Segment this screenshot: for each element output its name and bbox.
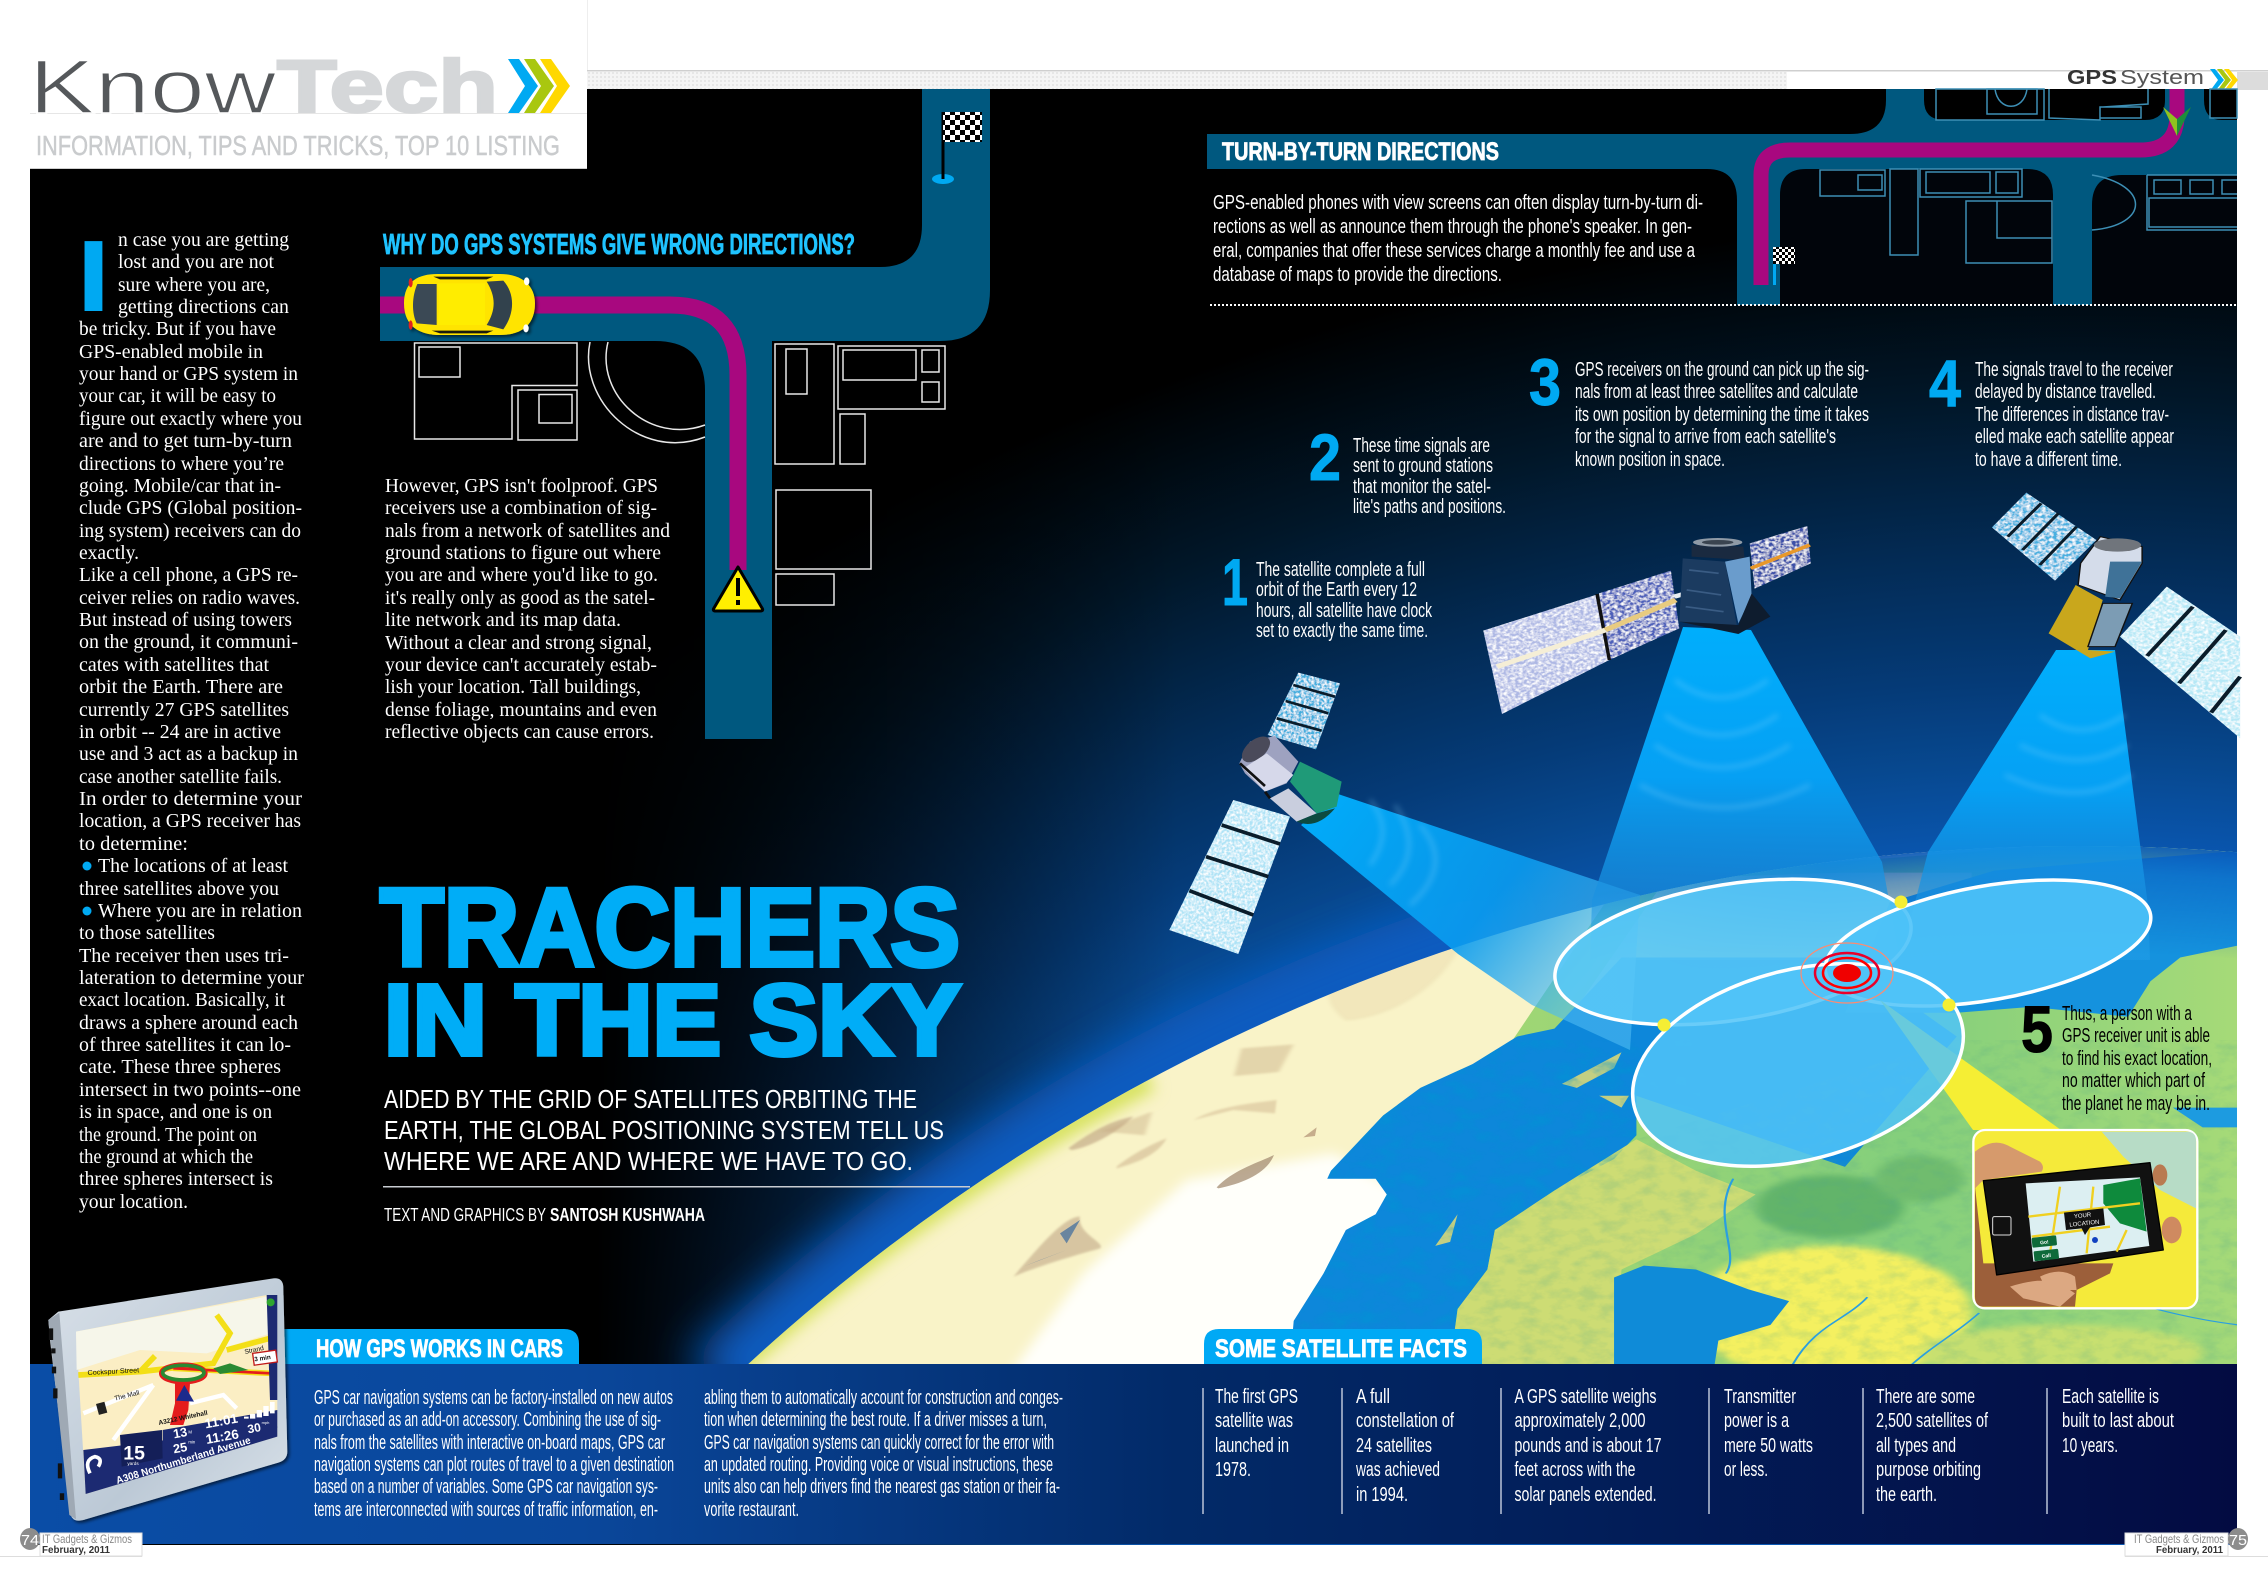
step 1: hours, all satellite have clock <box>1256 600 1433 622</box>
logo: KnowTech masthead <box>29 0 587 169</box>
text: GPS in cars: GPS car navigation systems can be factory-installed on new autos <box>314 1387 673 1409</box>
text: foolproof paragraph: your device can't accurately estab- <box>385 654 657 676</box>
text: intro column: going. Mobile/car that in- <box>79 475 281 497</box>
footer: page 74: February, 2011 <box>42 1544 110 1556</box>
globe: earth with sea and land masses <box>748 846 2237 1364</box>
text: foolproof paragraph: nals from a network of satellites and <box>385 520 670 542</box>
step 2: sent to ground stations <box>1353 455 1493 477</box>
step 4: The signals travel to the receiver <box>1975 359 2173 381</box>
text: intro column: exactly. <box>79 542 139 564</box>
fact 3: approximately 2,000 <box>1514 1410 1646 1432</box>
text: GPS in cars: based on a number of variables. Some GPS car navigation sys- <box>314 1476 658 1498</box>
text: intro column: cates with satellites that <box>79 654 269 676</box>
tab: some satellite facts: SOME SATELLITE FACTS <box>1215 1335 1467 1363</box>
text: intro column: figure out exactly where you <box>79 408 302 430</box>
inset: phone in hand: YOUR <box>2074 1212 2092 1220</box>
fact 4: power is a <box>1724 1410 1790 1432</box>
satellite 4 <box>1992 493 2240 738</box>
yellow connector to phone inset <box>1880 1000 2061 1130</box>
text: intro column: The locations of at least <box>98 855 288 877</box>
step 3: GPS receivers on the ground can pick up the sig- <box>1575 359 1869 381</box>
title rule <box>383 1186 970 1188</box>
text: intro column: sure where you are, <box>118 274 270 296</box>
text: GPS in cars: GPS car navigation systems can quickly correct for the error with <box>704 1432 1054 1454</box>
fact 4 <box>1724 1386 1813 1481</box>
text: turn-by-turn: database of maps to provide the directions. <box>1213 264 1502 286</box>
satellite 3 <box>1483 526 1811 714</box>
text: intro column: lateration to determine your <box>79 967 304 989</box>
text: GPS in cars: tion when determining the best route. If a driver misses a turn, <box>704 1409 1047 1431</box>
step 3: 3 <box>1529 345 1561 419</box>
text: foolproof paragraph: lite network and its map data. <box>385 609 621 631</box>
text: intro column: three satellites above you <box>79 878 279 900</box>
icon: car GPS device: mph <box>262 1420 269 1425</box>
text: GPS in cars: vorite restaurant. <box>704 1499 799 1521</box>
inset: phone in hand: LOCATION <box>2069 1220 2100 1229</box>
text: foolproof paragraph: ground stations to figure out where <box>385 542 661 564</box>
text: foolproof paragraph: you are and where you'd like to go. <box>385 564 658 586</box>
credit line <box>384 1205 705 1225</box>
text: intro column: on the ground, it communi- <box>79 631 298 653</box>
tab: how GPS works in cars: HOW GPS WORKS IN CARS <box>316 1335 563 1363</box>
text: intro column: n case you are getting <box>118 229 289 251</box>
footer: page 74: 74 <box>21 1532 39 1549</box>
step 4: The differences in distance trav- <box>1975 404 2169 426</box>
text: intro column: your car, it will be easy to <box>79 385 276 407</box>
fact 6 <box>2062 1386 2174 1457</box>
road map: wrong directions <box>380 89 990 739</box>
text: intro column: draws a sphere around each <box>79 1012 298 1034</box>
text: intro column: But instead of using towers <box>79 609 292 631</box>
inset: phone in hand: Go! <box>2040 1239 2049 1246</box>
credit line: SANTOSH KUSHWAHA <box>550 1205 705 1225</box>
icon: car GPS device: yards <box>127 1461 139 1466</box>
icon: car GPS device: 15 <box>123 1443 145 1464</box>
building outlines <box>1820 89 2237 263</box>
step 2: that monitor the satel- <box>1353 476 1491 498</box>
step 4 <box>1929 346 2174 471</box>
fact 5: 2,500 satellites of <box>1876 1410 1988 1432</box>
fact 5: the earth. <box>1876 1484 1937 1506</box>
text: intro column: to those satellites <box>79 922 215 944</box>
fact 1: satellite was <box>1215 1410 1293 1432</box>
text: intro column: to determine: <box>79 833 188 855</box>
step 3: for the signal to arrive from each satellite's <box>1575 426 1836 448</box>
inset: phone in hand: Call <box>2042 1253 2052 1260</box>
text: intro column: case another satellite fails. <box>79 766 282 788</box>
coverage circles on the ground <box>1545 857 2160 1199</box>
icon: car GPS device: Cockspur Street <box>87 1367 139 1377</box>
heading: turn-by-turn: TURN-BY-TURN DIRECTIONS <box>1222 138 1499 166</box>
tab: how GPS works in cars <box>284 1329 579 1364</box>
text: intro column: your location. <box>79 1191 188 1213</box>
drop cap: I <box>80 223 107 330</box>
route line <box>1761 89 2177 285</box>
logo: KnowTech masthead: INFORMATION, TIPS AND TRICKS, TOP 10 LISTING <box>36 130 560 161</box>
fact dividers <box>1203 1388 2047 1514</box>
title <box>380 866 961 1076</box>
icon: finish flag <box>932 112 982 184</box>
icon: warning triangle <box>713 567 763 611</box>
intersection dots <box>1658 896 1956 1032</box>
step 2: lite's paths and positions. <box>1353 496 1506 518</box>
text: GPS in cars: an updated routing. Providing voice or visual instructions, these <box>704 1454 1053 1476</box>
fact 2: constellation of <box>1356 1410 1454 1432</box>
fact 1: The first GPS <box>1215 1386 1298 1408</box>
fact 2: in 1994. <box>1356 1484 1408 1506</box>
text: GPS in cars: units also can help drivers find the nearest gas station or their fa- <box>704 1476 1060 1498</box>
text: turn-by-turn: GPS-enabled phones with view screens can often display turn-by-turn di- <box>1213 192 1703 214</box>
logo: KnowTech masthead: Tech <box>277 45 498 128</box>
text: intro column: are and to get turn-by-turn <box>79 430 292 452</box>
fact 6: Each satellite is <box>2062 1386 2159 1408</box>
step 2: These time signals are <box>1353 435 1490 457</box>
footer: page 74 <box>0 1528 142 1557</box>
fact 1: launched in <box>1215 1435 1289 1457</box>
text: intro column: ing system) receivers can do <box>79 520 301 542</box>
signal beam: satellite 4 <box>1900 650 2150 960</box>
city blocks top <box>1924 89 2237 120</box>
fact 3: feet across with the <box>1514 1459 1636 1481</box>
text: intro column: intersect in two points--one <box>79 1079 301 1101</box>
fact 2: A full <box>1356 1386 1390 1408</box>
running header strip <box>587 0 2268 90</box>
icon: car GPS device: A308 Northumberland Avenue <box>115 1435 252 1487</box>
inset: phone in hand <box>1973 1130 2197 1308</box>
icon: car GPS device <box>48 1278 287 1521</box>
dotted divider <box>1210 304 2237 306</box>
step 2 <box>1309 420 1506 518</box>
text: intro column: location, a GPS receiver has <box>79 810 301 832</box>
text: GPS in cars: tems are interconnected with sources of traffic information, en- <box>314 1499 658 1521</box>
subtitle: AIDED BY THE GRID OF SATELLITES ORBITING THE <box>384 1084 917 1114</box>
heading: wrong directions: WHY DO GPS SYSTEMS GIVE WRONG DIRECTIONS? <box>383 229 855 261</box>
text: foolproof paragraph: dense foliage, mountains and even <box>385 699 657 721</box>
step 5: no matter which part of <box>2062 1070 2205 1092</box>
credit line: TEXT AND GRAPHICS BY <box>384 1205 546 1225</box>
fact 2: 24 satellites <box>1356 1435 1432 1457</box>
tab: some satellite facts <box>1204 1329 1482 1364</box>
text: turn-by-turn: eral, companies that offer these services charge a monthly fee and use a <box>1213 240 1696 262</box>
signal beam: satellite 3 <box>1590 627 1900 960</box>
text: intro column: cate. These three spheres <box>79 1056 281 1078</box>
fact 5 <box>1876 1386 1988 1506</box>
building outlines <box>414 342 945 605</box>
fact 6: built to last about <box>2062 1410 2174 1432</box>
step 4: elled make each satellite appear <box>1975 426 2174 448</box>
section label: GPS System <box>2067 67 2238 91</box>
text: intro column: of three satellites it can lo- <box>79 1034 291 1056</box>
step 3 <box>1529 345 1869 471</box>
fact 3: pounds and is about 17 <box>1514 1435 1662 1457</box>
step 3: its own position by determining the time it takes <box>1575 404 1869 426</box>
route line <box>380 305 738 570</box>
step 4: 4 <box>1929 346 1961 420</box>
footer: page 75: 75 <box>2229 1532 2247 1549</box>
text: intro column <box>79 223 304 1213</box>
icon: car GPS device: Strand <box>244 1345 265 1356</box>
fact 3 <box>1514 1386 1662 1506</box>
text: intro column: in orbit -- 24 are in active <box>79 721 281 743</box>
step 1: 1 <box>1222 545 1248 619</box>
text: GPS in cars: or purchased as an add-on accessory. Combining the use of sig- <box>314 1409 661 1431</box>
text: foolproof paragraph: Without a clear and strong signal, <box>385 632 652 654</box>
step 4: delayed by distance travelled. <box>1975 381 2156 403</box>
text: turn-by-turn: rections as well as announce them through the phone's speaker. In gen- <box>1213 216 1692 238</box>
step 1: set to exactly the same time. <box>1256 620 1428 642</box>
text: foolproof paragraph: it's really only as good as the satel- <box>385 587 655 609</box>
icon: car GPS device: A3212 Whitehall <box>158 1410 208 1427</box>
road map: turn-by-turn <box>1207 89 2237 305</box>
icon: car GPS device: min <box>188 1439 196 1444</box>
step 4: to have a different time. <box>1975 449 2122 471</box>
icon: yellow car <box>404 274 535 335</box>
signal ripples <box>1370 680 2132 905</box>
city blocks bottom <box>1780 169 2237 305</box>
fact 3: solar panels extended. <box>1514 1484 1656 1506</box>
text: intro column: The receiver then uses tri- <box>79 945 289 967</box>
step 5 <box>2021 992 2212 1115</box>
icon: green direction arrow <box>2163 107 2191 136</box>
icon: small finish flag <box>1773 247 1795 285</box>
fact 4: Transmitter <box>1724 1386 1796 1408</box>
text: intro column: Like a cell phone, a GPS re- <box>79 564 298 586</box>
icon: car GPS device: M <box>188 1429 192 1434</box>
text: intro column: orbit the Earth. There are <box>79 676 283 698</box>
text: foolproof paragraph: reflective objects can cause errors. <box>385 721 654 743</box>
icon: car GPS device: 13 <box>172 1425 188 1441</box>
text: intro column: your hand or GPS system in <box>79 363 298 385</box>
text: intro column: GPS-enabled mobile in <box>79 341 263 363</box>
text: foolproof paragraph <box>385 475 670 743</box>
text: GPS in cars: navigation systems can plot routes of travel to a given destination <box>314 1454 674 1476</box>
text: intro column: the ground at which the <box>79 1146 253 1168</box>
icon: car GPS device: 11:01 <box>204 1411 240 1431</box>
text: foolproof paragraph: However, GPS isn't foolproof. GPS <box>385 475 658 497</box>
step 1: orbit of the Earth every 12 <box>1256 579 1417 601</box>
text: turn-by-turn <box>1213 192 1703 286</box>
text: foolproof paragraph: lish your location. Tall buildings, <box>385 676 641 698</box>
subtitle: WHERE WE ARE AND WHERE WE HAVE TO GO. <box>384 1146 913 1176</box>
text: intro column: Where you are in relation <box>98 900 302 922</box>
text: intro column: be tricky. But if you have <box>79 318 276 340</box>
section label: GPS System: System <box>2120 67 2204 89</box>
location target <box>1801 943 1893 1003</box>
step 5: Thus, a person with a <box>2062 1003 2193 1025</box>
footer: page 75: February, 2011 <box>2156 1544 2223 1556</box>
footer: page 75 <box>2125 1528 2268 1557</box>
text: GPS in cars: nals from the satellites with interactive on-board maps, GPS car <box>314 1432 665 1454</box>
subtitle <box>384 1084 944 1176</box>
bottom blue band <box>30 1364 2237 1544</box>
section label: GPS System: GPS <box>2067 67 2117 89</box>
text: intro column: lost and you are not <box>118 251 274 273</box>
fact 6: 10 years. <box>2062 1435 2118 1457</box>
text: intro column: currently 27 GPS satellites <box>79 699 289 721</box>
icon: car GPS device: 11:26 <box>205 1426 240 1447</box>
fact 1 <box>1215 1386 1298 1481</box>
step 5: 5 <box>2021 992 2053 1066</box>
title: TRACHERS <box>380 866 960 990</box>
icon: car GPS device: 3 min <box>254 1354 271 1363</box>
text: intro column: is in space, and one is on <box>79 1101 272 1123</box>
step 3: known position in space. <box>1575 449 1725 471</box>
step 2: 2 <box>1309 420 1341 494</box>
text: foolproof paragraph: receivers use a combination of sig- <box>385 497 657 519</box>
title: IN THE SKY <box>384 964 961 1076</box>
fact 4: or less. <box>1724 1459 1768 1481</box>
fact 1: 1978. <box>1215 1459 1251 1481</box>
text: GPS in cars <box>314 1387 1063 1521</box>
step 3: nals from at least three satellites and calculate <box>1575 381 1858 403</box>
footer: page 74: IT Gadgets & Gizmos <box>42 1532 132 1546</box>
text: intro column: getting directions can <box>118 296 289 318</box>
fact 5: There are some <box>1876 1386 1975 1408</box>
text: intro column: In order to determine your <box>79 788 302 810</box>
fact 4: mere 50 watts <box>1724 1435 1813 1457</box>
logo: KnowTech masthead: Know <box>29 45 277 130</box>
text: intro column: use and 3 act as a backup in <box>79 743 298 765</box>
fact 2 <box>1355 1386 1454 1506</box>
satellite 1 <box>1169 673 1342 954</box>
icon: car GPS device: The Mall <box>114 1390 141 1403</box>
icon: car GPS device: 30 <box>246 1420 262 1436</box>
fact 5: all types and <box>1876 1435 1956 1457</box>
step 1: The satellite complete a full <box>1256 559 1425 581</box>
text: intro column: directions to where you’re <box>79 453 284 475</box>
text: GPS in cars: abling them to automatically account for construction and conges- <box>704 1387 1063 1409</box>
text: intro column: the ground. The point on <box>79 1124 257 1146</box>
footer: page 75: IT Gadgets & Gizmos <box>2134 1532 2224 1546</box>
icon: car GPS device: 25 <box>172 1440 188 1456</box>
fact 3: A GPS satellite weighs <box>1514 1386 1656 1408</box>
text: intro column: ceiver relies on radio waves. <box>79 587 300 609</box>
text: intro column: exact location. Basically, it <box>79 989 285 1011</box>
fact 2: was achieved <box>1355 1459 1440 1481</box>
step 1 <box>1222 545 1433 642</box>
text: intro column: three spheres intersect is <box>79 1168 273 1190</box>
text: intro column: clude GPS (Global position- <box>79 497 302 519</box>
subtitle: EARTH, THE GLOBAL POSITIONING SYSTEM TELL US <box>384 1115 944 1145</box>
fact 5: purpose orbiting <box>1876 1459 1981 1481</box>
signal beam: satellite 1 <box>1301 794 1640 1050</box>
